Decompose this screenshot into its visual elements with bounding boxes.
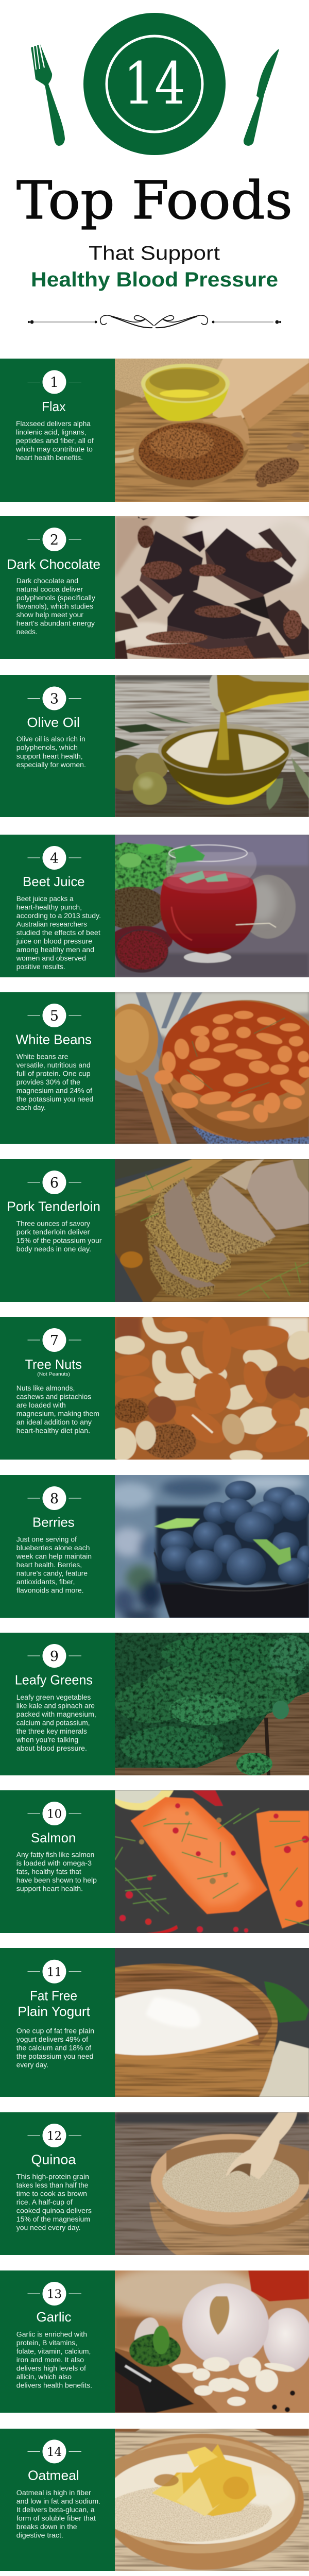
number badge 13: 13 <box>47 2287 62 2301</box>
text column <box>0 2429 115 2571</box>
description: Garlic is enriched with <box>16 2330 87 2338</box>
text column <box>0 1317 115 1460</box>
description: which may contribute to <box>15 445 93 453</box>
number badge 2: 2 <box>50 532 59 548</box>
heading: Pork Tenderloin <box>7 1199 100 1214</box>
description: are loaded with <box>16 1401 66 1409</box>
description <box>16 1851 97 1893</box>
panel: dark chocolate <box>0 509 309 659</box>
description: versatile, nutritious and <box>16 1061 91 1069</box>
photo: baked white beans <box>115 992 309 1144</box>
heading: Fat Free <box>30 1988 77 2003</box>
number badge 6 <box>28 1171 81 1194</box>
number badge 12 <box>28 2124 81 2147</box>
number badge 7: 7 <box>50 1333 59 1349</box>
panel: leafy greens <box>0 1633 309 1775</box>
panel: tree nuts <box>0 1315 309 1463</box>
description: digestive tract. <box>16 2531 63 2539</box>
heading: Dark Chocolate <box>7 556 100 572</box>
description: Olive oil is also rich in <box>16 735 85 743</box>
number badge 10 <box>28 1802 81 1825</box>
description: rice. A half-cup of <box>16 2198 73 2206</box>
photo: oatmeal with apples <box>115 2429 309 2571</box>
number badge 8 <box>28 1486 81 1510</box>
description: allicin, which also <box>16 2373 72 2381</box>
header <box>16 13 293 328</box>
description <box>16 2489 100 2539</box>
icon: fork <box>31 44 65 146</box>
description: magnesium, making them <box>16 1410 99 1418</box>
description: Australian researchers <box>16 920 87 928</box>
description: is loaded with omega-3 <box>16 1859 92 1867</box>
number badge 3: 3 <box>50 691 59 707</box>
description: heart's abundant energy <box>16 619 95 628</box>
description: support heart health, <box>16 752 83 760</box>
description: White beans are <box>16 1053 68 1061</box>
description: heart health benefits. <box>16 454 83 462</box>
description: One cup of fat free plain <box>16 2027 94 2035</box>
description: full of protein. One cup <box>16 1070 91 1078</box>
icon: plate with number 14: 14 <box>124 50 185 117</box>
description: each day. <box>16 1104 46 1112</box>
description: especially for women. <box>16 761 86 769</box>
heading: Tree Nuts <box>25 1357 82 1372</box>
description: Any fatty fish like salmon <box>16 1851 94 1859</box>
description: This high-protein grain <box>16 2173 89 2181</box>
heading: Flax <box>42 399 66 414</box>
description: protein, B vitamins, <box>16 2339 77 2347</box>
description: polyphenols, which <box>16 744 78 751</box>
description: linolenic acid, lignans, <box>16 429 87 436</box>
description <box>15 420 94 462</box>
panel: olive oil <box>0 675 309 817</box>
description: nature's candy, feature <box>16 1570 88 1578</box>
photo: kale <box>115 1633 309 1775</box>
number badge 1: 1 <box>50 375 59 391</box>
description <box>16 1219 102 1253</box>
text column <box>0 1948 115 2097</box>
description: delivers health benefits. <box>16 2381 92 2389</box>
description: women and observed <box>16 954 86 962</box>
description: natural cocoa deliver <box>16 585 83 594</box>
description: pork tenderloin deliver <box>16 1228 90 1236</box>
photo: garlic on cutting board <box>115 2270 309 2413</box>
description: form of soluble fiber that <box>16 2514 96 2522</box>
number badge 8: 8 <box>50 1491 59 1507</box>
text column <box>0 2112 115 2255</box>
heading: Quinoa <box>31 2151 76 2167</box>
subtitle: Healthy Blood Pressure: Healthy Blood Pressure <box>31 268 278 291</box>
description: peptides and fiber, all of <box>16 437 94 445</box>
title: Top Foods: Top Foods <box>16 170 293 231</box>
description <box>16 895 101 971</box>
description: flavanols), which studies <box>16 603 93 610</box>
description: the potassium you need <box>16 1095 93 1103</box>
description: cooked quinoa delivers <box>16 2207 92 2215</box>
photo: dark chocolate pieces <box>115 516 309 659</box>
heading: Plain Yogurt <box>18 2004 91 2019</box>
number badge 11 <box>28 1960 81 1984</box>
number badge 7 <box>28 1328 81 1352</box>
description: the calcium and 18% of <box>16 2044 91 2052</box>
description: show help meet your <box>16 611 84 619</box>
description: breaks down in the <box>16 2523 77 2531</box>
description: iron and more. It also <box>16 2356 84 2364</box>
photo: sliced pork tenderloin <box>115 1159 309 1302</box>
icon: knife <box>244 49 279 146</box>
description: folate, vitamin, calcium, <box>16 2347 91 2355</box>
description: heart-healthy punch, <box>16 904 82 911</box>
ornamental divider <box>28 315 281 328</box>
description: among healthy men and <box>16 946 94 954</box>
text column <box>0 359 115 502</box>
photo: blueberries in bowl <box>115 1475 309 1618</box>
description: fats, healthy fats that <box>16 1868 81 1875</box>
description: takes less than half the <box>16 2181 88 2189</box>
number badge 2 <box>28 528 81 551</box>
description: antioxidants, fiber, <box>16 1578 75 1586</box>
number badge 12: 12 <box>47 2130 62 2143</box>
description: the potassium you need <box>16 2053 93 2060</box>
description <box>16 1384 99 1434</box>
description: heart-healthy diet plan. <box>16 1427 90 1434</box>
description: week can help maintain <box>16 1553 92 1561</box>
description <box>16 735 86 769</box>
photo: mixed tree nuts <box>115 1317 309 1460</box>
photo: yogurt in wooden bowl <box>115 1948 309 2097</box>
number badge 5 <box>28 1004 81 1027</box>
description: magnesium and 24% of <box>16 1087 92 1095</box>
description: have been shown to help <box>16 1876 97 1884</box>
description: Leafy green vegetables <box>16 1693 91 1701</box>
description: the three key minerals <box>16 1727 87 1735</box>
number badge 14: 14 <box>47 2446 62 2459</box>
heading: Oatmeal <box>28 2468 79 2483</box>
panel: white beans <box>0 992 309 1144</box>
description <box>16 1536 92 1595</box>
photo: quinoa in wooden bowls <box>115 2112 309 2255</box>
description: heart health. Berries, <box>16 1561 82 1569</box>
description <box>16 2173 92 2232</box>
description: like kale and spinach are <box>16 1702 95 1709</box>
number badge 9 <box>28 1644 81 1668</box>
heading: Beet Juice <box>23 874 85 889</box>
panel: quinoa <box>0 2112 309 2255</box>
text column <box>0 1633 115 1775</box>
icon: plate with number 14 <box>83 13 226 155</box>
description: yogurt delivers 49% of <box>16 2036 88 2043</box>
description: Three ounces of savory <box>16 1219 90 1227</box>
description: Oatmeal is high in fiber <box>16 2489 91 2497</box>
description: 15% of the magnesium <box>16 2215 90 2223</box>
number badge 4: 4 <box>50 851 59 867</box>
number badge 14 <box>28 2439 81 2463</box>
description: time to cook as brown <box>16 2190 87 2198</box>
description: when you're talking <box>16 1736 78 1743</box>
heading: Garlic <box>36 2309 71 2325</box>
number badge 6: 6 <box>50 1175 59 1191</box>
description: delivers high levels of <box>16 2364 86 2372</box>
panel: oatmeal <box>0 2429 309 2571</box>
description: provides 30% of the <box>16 1078 80 1086</box>
description: polyphenols (specifically <box>16 594 95 602</box>
description: packed with magnesium, <box>16 1710 96 1718</box>
heading: White Beans <box>16 1032 92 1047</box>
heading: Berries <box>32 1514 75 1530</box>
description: Beet juice packs a <box>16 895 74 903</box>
number badge 1 <box>28 370 81 394</box>
panel: fat free plain yogurt <box>0 1948 309 2097</box>
description: about blood pressure. <box>16 1744 87 1752</box>
description: body needs in one day. <box>16 1245 91 1253</box>
description: flavonoids and more. <box>16 1587 84 1595</box>
description: an ideal addition to any <box>16 1418 92 1426</box>
panel: garlic <box>0 2265 309 2413</box>
description: needs. <box>16 628 38 636</box>
number badge 5: 5 <box>50 1008 59 1024</box>
description: according to a 2013 study. <box>16 912 101 920</box>
heading: Olive Oil <box>27 715 80 730</box>
description <box>16 1693 96 1752</box>
description: calcium and potassium, <box>16 1719 90 1726</box>
description: Just one serving of <box>16 1536 77 1544</box>
description: Flaxseed delivers alpha <box>16 420 91 428</box>
text column <box>0 516 115 659</box>
panel: flax <box>0 359 309 502</box>
description: cashews and pistachios <box>16 1393 91 1400</box>
description <box>16 2027 94 2069</box>
text column <box>0 1790 115 1933</box>
number badge 11: 11 <box>47 1965 62 1979</box>
number badge 3 <box>28 686 81 710</box>
description: juice on blood pressure <box>16 938 92 945</box>
panel: beet juice <box>0 835 309 977</box>
photo: olive oil bowl <box>115 675 309 817</box>
description: support heart health. <box>16 1885 83 1893</box>
description <box>16 1053 93 1112</box>
description <box>16 2330 92 2389</box>
panel: pork tenderloin <box>0 1159 309 1302</box>
heading: Salmon <box>31 1830 76 1845</box>
note: not peanuts: (Not Peanuts) <box>37 1371 70 1377</box>
text column <box>0 835 115 977</box>
heading <box>18 1988 91 2019</box>
subtitle: That Support: That Support <box>89 243 220 264</box>
description: studied the effects of beet <box>16 929 100 937</box>
text column <box>0 675 115 817</box>
number badge 13 <box>28 2282 81 2306</box>
description: 15% of the potassium your <box>16 1236 102 1244</box>
photo: flax seeds and oil <box>115 359 309 502</box>
description: every day. <box>16 2061 48 2069</box>
photo: salmon fillets <box>115 1790 309 1933</box>
description: positive results. <box>16 963 65 971</box>
text column <box>0 992 115 1144</box>
text column <box>0 2270 115 2413</box>
number badge 10: 10 <box>47 1807 62 1821</box>
description: you need every day. <box>16 2224 80 2232</box>
description: blueberries alone each <box>16 1544 90 1552</box>
heading: Leafy Greens <box>15 1672 93 1688</box>
number badge 4 <box>28 846 81 870</box>
description <box>16 577 95 636</box>
panel: berries <box>0 1475 309 1623</box>
text column <box>0 1475 115 1618</box>
number badge 9: 9 <box>50 1649 59 1665</box>
description: and low in fat and sodium. <box>16 2497 100 2505</box>
description: It delivers beta-glucan, a <box>16 2506 95 2514</box>
photo: beet juice glass <box>115 835 309 977</box>
description: Dark chocolate and <box>16 577 78 585</box>
panel: salmon <box>0 1790 309 1933</box>
text column <box>0 1159 115 1302</box>
description: Nuts like almonds, <box>16 1384 75 1392</box>
